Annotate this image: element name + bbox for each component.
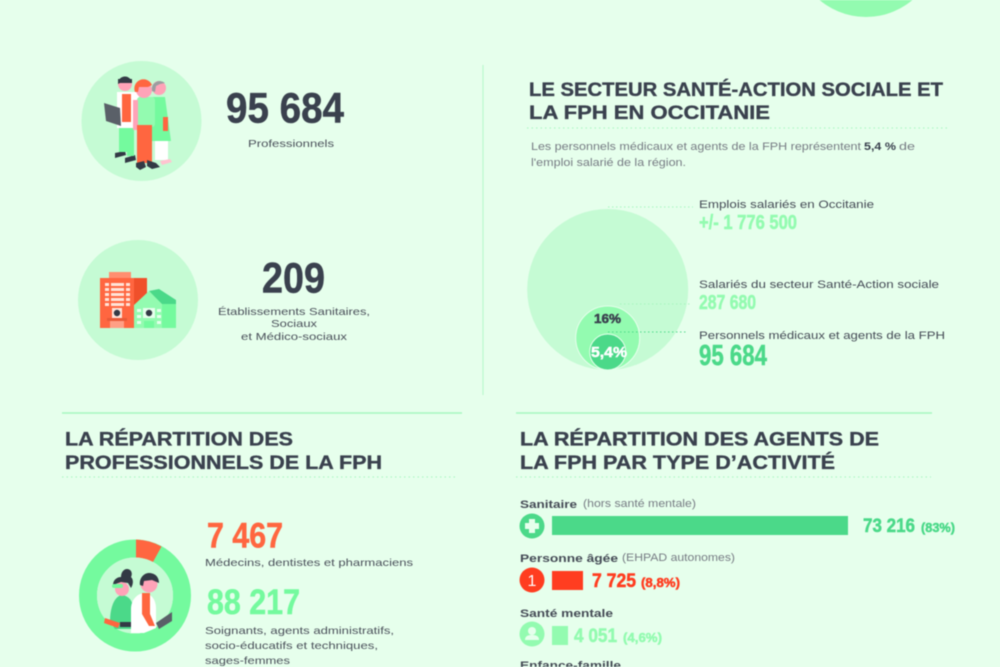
- legend: employment in Occitanie: +/- 1 776 500: [699, 212, 797, 234]
- icon: number one: 1: [528, 573, 537, 590]
- icon: three health professionals: [82, 61, 202, 181]
- text: sector description: 5,4 %: [864, 141, 896, 153]
- label: establishments: Établissements Sanitaires,: [218, 305, 370, 318]
- panel: establishments count: [78, 240, 370, 360]
- label: Professionnels: Professionnels: [248, 138, 334, 150]
- stat: 7 467: 7 467: [207, 516, 283, 556]
- bar: Santé mentale: Santé mentale: [520, 608, 613, 620]
- panel: health and social action sector: [527, 79, 947, 372]
- chart: nested circles: 5,4%: [591, 344, 627, 361]
- stat: 88 217: [205, 583, 394, 667]
- legend: sector employees: [699, 279, 939, 314]
- icon: person: [520, 622, 544, 646]
- panel: agents by activity type: [516, 428, 955, 667]
- heading: sector: LA FPH EN OCCITANIE: [529, 103, 770, 124]
- stat: 88 217: Soignants, agents administratifs,: [205, 625, 394, 637]
- text: sector description: Les personnels médicaux et agents de la FPH représentent: [531, 141, 861, 153]
- legend: employment in Occitanie: [699, 199, 874, 234]
- stat: 88 217: socio-éducatifs et techniques,: [205, 640, 378, 652]
- chart: donut of professionals: [88, 540, 182, 642]
- bar: Personne âgée: [520, 552, 735, 592]
- bar: Personne âgée: 7 725: [592, 571, 636, 592]
- bar: Sanitaire: [520, 498, 955, 538]
- text: sector description: de: [899, 141, 915, 153]
- heading: agents by activity type: LA FPH PAR TYPE D’ACTIVITÉ: [520, 452, 835, 474]
- bar: Sanitaire: (hors santé mentale): [583, 498, 696, 510]
- stat: 95 684: 95 684: [226, 84, 344, 132]
- stat: 88 217: 88 217: [207, 583, 300, 622]
- bar: Personne âgée: (EHPAD autonomes): [622, 552, 735, 564]
- bar: Personne âgée: (8,8%): [641, 575, 680, 590]
- stat: 88 217: sages-femmes: [205, 655, 290, 667]
- bar: Personne âgée: Personne âgée: [520, 553, 618, 565]
- heading: sector: LE SECTEUR SANTÉ-ACTION SOCIALE ET: [529, 79, 943, 101]
- bar: Santé mentale: [520, 608, 662, 647]
- label: establishments: [218, 305, 370, 343]
- stat: 7 467: [205, 516, 413, 569]
- panel: professionals count: [82, 61, 344, 181]
- stat: 7 467: Médecins, dentistes et pharmaciens: [205, 557, 413, 569]
- icon: hospital buildings: [78, 240, 198, 360]
- legend: employment in Occitanie: Emplois salariés en Occitanie: [699, 199, 874, 211]
- panel: distribution of professionals: [62, 428, 458, 667]
- heading: distribution of professionals: [65, 428, 382, 474]
- stat: 209: 209: [262, 254, 325, 302]
- legend: sector employees: Salariés du secteur Santé-Action sociale: [699, 279, 939, 291]
- top decorative circle: [794, 0, 938, 17]
- chart: nested circles: [527, 209, 688, 370]
- heading: distribution of professionals: PROFESSIONNELS DE LA FPH: [65, 453, 382, 474]
- legend: FPH staff: Personnels médicaux et agents de la FPH: [699, 330, 945, 342]
- bar: Sanitaire: Sanitaire: [520, 499, 577, 511]
- legend: FPH staff: [699, 330, 945, 372]
- bar: Santé mentale: 4 051: [574, 626, 617, 647]
- legend: FPH staff: 95 684: [699, 340, 767, 372]
- icon: number one: [520, 568, 544, 592]
- heading: agents by activity type: LA RÉPARTITION DES AGENTS DE: [520, 428, 879, 450]
- text: sector description: [531, 141, 915, 169]
- chart: nested circles: 16%: [594, 311, 621, 326]
- text: sector description: l'emploi salarié de la région.: [531, 157, 686, 169]
- bar: Santé mentale: (4,6%): [623, 630, 662, 645]
- heading: sector: [529, 79, 943, 124]
- label: establishments: et Médico-sociaux: [241, 331, 348, 343]
- legend: sector employees: 287 680: [699, 292, 756, 314]
- label: establishments: Sociaux: [271, 318, 318, 330]
- bar: Sanitaire: 73 216: [863, 516, 915, 537]
- icon: medical cross: [520, 514, 544, 538]
- heading: agents by activity type: [520, 428, 879, 474]
- bar: Sanitaire: (83%): [921, 520, 955, 535]
- heading: distribution of professionals: LA RÉPARTITION DES: [65, 428, 293, 450]
- icon: two seated people: [104, 569, 172, 633]
